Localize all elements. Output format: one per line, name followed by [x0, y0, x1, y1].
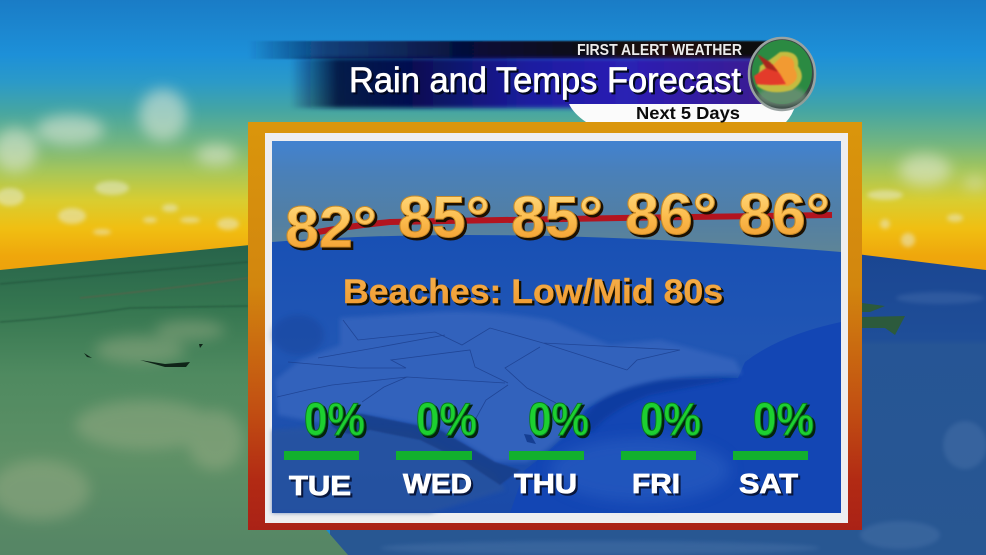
map dark coastline: [330, 414, 520, 485]
day tue: TUE: [291, 472, 353, 503]
beaches text: Beaches: Low/Mid 80s: [345, 275, 725, 313]
map bay: [524, 434, 536, 444]
day sat: SAT: [741, 470, 800, 501]
day wed: WED: [405, 470, 474, 501]
header banner: [248, 38, 815, 123]
banner top strip: [248, 41, 778, 59]
rain sat: 0%: [753, 393, 814, 445]
temp wed: 85°: [400, 187, 492, 252]
ocean sparkle: [380, 292, 986, 555]
map lower land: [272, 425, 505, 513]
map gulf stream band: [580, 378, 740, 432]
panel white border: [265, 133, 848, 523]
day fri: FRI: [632, 468, 680, 499]
first alert label: FIRST ALERT WEATHER: [577, 42, 742, 59]
land on the globe: [0, 244, 348, 555]
map ocean: [510, 322, 841, 513]
day labels: [289, 468, 800, 503]
background sky: [0, 0, 986, 280]
temp sat: 86°: [740, 184, 832, 249]
day wed: WED: [403, 468, 472, 499]
rain fri: 0%: [642, 395, 703, 447]
red temperature trend line: [318, 215, 832, 232]
temp thu: 85°: [513, 187, 605, 252]
temp tue: 82°: [287, 197, 379, 262]
rain tue: 0%: [304, 393, 365, 445]
green bars: [284, 451, 808, 460]
rain thu: 0%: [528, 393, 589, 445]
temp wed: 85°: [398, 185, 490, 250]
radar icon: [749, 38, 815, 110]
temp fri: 86°: [627, 184, 719, 249]
subtitle text: Next 5 Days: [636, 103, 740, 123]
temperature values: [285, 182, 832, 262]
rain wed: 0%: [416, 393, 477, 445]
clouds: [0, 89, 986, 247]
rain chance values: [304, 393, 816, 447]
panel frame: [248, 122, 862, 530]
rain fri: 0%: [640, 393, 701, 445]
banner title: Rain and Temps Forecast: [349, 61, 741, 100]
rain thu: 0%: [530, 395, 591, 447]
map land states: [275, 312, 742, 462]
rain tue: 0%: [306, 395, 367, 447]
beaches text: Beaches: Low/Mid 80s: [343, 273, 723, 311]
day sat: SAT: [739, 468, 798, 499]
coastal peninsula: [862, 303, 905, 335]
temp sat: 86°: [738, 182, 830, 247]
temp fri: 86°: [625, 182, 717, 247]
banner title: Rain and Temps Forecast: [351, 63, 743, 102]
day thu: THU: [516, 470, 579, 501]
ocean on the globe: [330, 252, 986, 555]
map dark left region: [272, 315, 324, 355]
day fri: FRI: [634, 470, 682, 501]
map ocean sparkle: [550, 438, 730, 502]
panel inner map: [272, 141, 841, 513]
land dark streaks: [0, 262, 248, 322]
temp tue: 82°: [285, 195, 377, 260]
panel globe surface: [272, 235, 841, 513]
subtitle tab: [569, 104, 796, 122]
lakes: [84, 344, 203, 367]
day thu: THU: [514, 468, 577, 499]
temp thu: 85°: [511, 185, 603, 250]
map state lines: [277, 320, 680, 420]
rain wed: 0%: [418, 395, 479, 447]
day tue: TUE: [289, 470, 351, 501]
land lighter patches: [0, 320, 243, 520]
rain sat: 0%: [755, 395, 816, 447]
banner main strip: [290, 58, 770, 108]
